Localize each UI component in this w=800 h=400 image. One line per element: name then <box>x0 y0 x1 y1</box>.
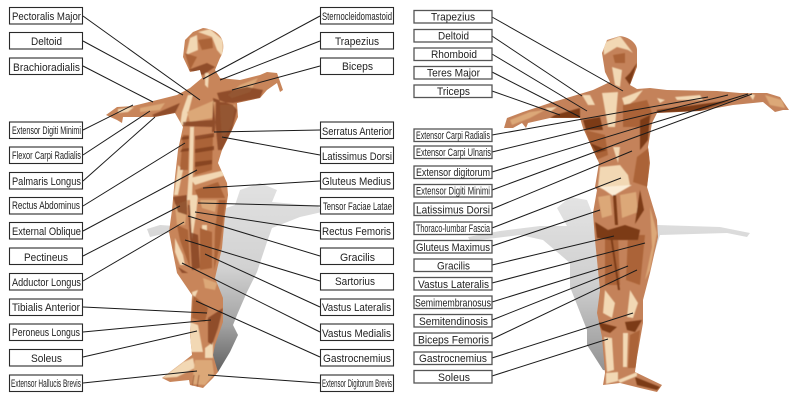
label column: back figure <box>414 10 492 384</box>
label: Teres Major <box>414 66 492 80</box>
label: Thoraco-lumbar Fascia <box>414 222 492 235</box>
label: Gluteus Maximus: Gluteus Maximus <box>416 242 490 254</box>
label: Sternocleidomastoid <box>320 8 394 24</box>
label: Deltoid <box>10 32 82 49</box>
label: Biceps <box>320 58 394 74</box>
label: Extensor Digitorum Brevis <box>320 375 394 392</box>
label column: front figure left <box>10 8 82 392</box>
label: Extensor Digiti Minimi <box>414 184 492 198</box>
label: Extensor digitorum: Extensor digitorum <box>416 167 490 179</box>
label: Serratus Anterior <box>320 122 394 138</box>
label: Adductor Longus <box>10 274 82 290</box>
label: Vastus Medialis <box>320 324 394 340</box>
label: Semitendinosis: Semitendinosis <box>419 316 488 328</box>
label: Semimembranosus: Semimembranosus <box>415 298 491 310</box>
label: Gracilis: Gracilis <box>340 252 375 264</box>
label: Flexor Carpi Radialis: Flexor Carpi Radialis <box>12 150 81 162</box>
leader lines: back figure <box>492 17 752 376</box>
label: Gluteus Medius: Gluteus Medius <box>322 176 391 188</box>
label: Serratus Anterior: Serratus Anterior <box>322 126 392 138</box>
label: Triceps: Triceps <box>437 86 470 98</box>
label: Gastrocnemius: Gastrocnemius <box>419 353 487 365</box>
label: Trapezius: Trapezius <box>335 36 379 48</box>
label: Extensor Carpi Radialis <box>414 129 492 142</box>
label: Tibialis Anterior: Tibialis Anterior <box>12 302 80 314</box>
label: Soleus <box>10 350 82 366</box>
label: Brachioradialis <box>10 58 82 74</box>
label: Vastus Lateralis: Vastus Lateralis <box>322 302 391 314</box>
label: Rhomboid <box>414 48 492 61</box>
label: Gastrocnemius: Gastrocnemius <box>323 353 391 365</box>
label: Pectineus <box>10 248 82 264</box>
label: Rectus Abdominus <box>10 198 82 214</box>
front muscle detail <box>118 29 263 388</box>
back muscle detail <box>510 36 785 390</box>
label: Rhomboid: Rhomboid <box>431 49 477 61</box>
label: Pectoralis Major <box>10 8 82 24</box>
label: Pectoralis Major: Pectoralis Major <box>12 11 81 23</box>
label: Rectus Femoris <box>320 222 394 239</box>
label: Soleus: Soleus <box>31 353 62 365</box>
label: Triceps <box>414 85 492 98</box>
label: Extensor Carpi Ulnaris <box>414 146 492 159</box>
label: Teres Major: Teres Major <box>427 68 480 80</box>
label: Extensor Hallucis Brevis <box>10 375 82 392</box>
label: Vastus Lateralis <box>320 299 394 316</box>
label: Latissimus Dorsi: Latissimus Dorsi <box>322 151 392 163</box>
label: Extensor Hallucis Brevis: Extensor Hallucis Brevis <box>11 378 81 390</box>
label: Latissimus Dorsi <box>320 147 394 164</box>
label: Gracilis: Gracilis <box>437 260 470 272</box>
label: Extensor Digiti Minimi: Extensor Digiti Minimi <box>416 186 490 198</box>
label: Peroneus Longus: Peroneus Longus <box>12 327 80 339</box>
leader lines: front figure <box>83 16 320 383</box>
label: External Oblique: External Oblique <box>12 226 81 238</box>
back body silhouette <box>504 36 789 392</box>
label: Vastus Medialis: Vastus Medialis <box>322 328 391 340</box>
label: Extensor Digitorum Brevis: Extensor Digitorum Brevis <box>322 378 392 390</box>
label: Gastrocnemius <box>320 350 394 366</box>
label: Sartorius: Sartorius <box>335 276 375 288</box>
label: Biceps: Biceps <box>342 61 373 73</box>
label: Gracilis <box>320 248 394 264</box>
label: Deltoid <box>414 30 492 42</box>
front body silhouette <box>106 28 283 388</box>
label: Vastus Lateralis: Vastus Lateralis <box>418 279 489 291</box>
label: Gluteus Medius <box>320 172 394 189</box>
label: Extensor Carpi Radialis: Extensor Carpi Radialis <box>416 130 490 142</box>
label: Rectus Femoris: Rectus Femoris <box>322 226 391 238</box>
shadow: back figure <box>468 197 750 372</box>
label: Peroneus Longus <box>10 324 82 340</box>
label: Trapezius: Trapezius <box>431 12 475 24</box>
leg gap showing shadow <box>616 295 624 370</box>
figure: back muscular man <box>504 36 789 392</box>
label: Extensor Digiti Minimi <box>10 122 82 138</box>
label: Tensor Faciae Latae: Tensor Faciae Latae <box>323 201 392 213</box>
label: Sartorius <box>320 274 394 290</box>
label: Soleus: Soleus <box>438 372 470 384</box>
label: External Oblique <box>10 222 82 239</box>
label: Adductor Longus: Adductor Longus <box>12 277 81 289</box>
label: Extensor Carpi Ulnaris: Extensor Carpi Ulnaris <box>416 147 491 159</box>
label: Gracilis <box>414 259 492 272</box>
label: Palmaris Longus: Palmaris Longus <box>12 176 81 188</box>
label: Pectineus: Pectineus <box>24 252 68 264</box>
label: Latissimus Dorsi: Latissimus Dorsi <box>416 204 490 216</box>
label: Soleus <box>414 370 492 384</box>
shadow: front figure <box>147 183 322 372</box>
label: Tensor Faciae Latae <box>320 198 394 214</box>
label: Trapezius <box>320 32 394 49</box>
label: Tibialis Anterior <box>10 299 82 316</box>
label: Palmaris Longus <box>10 172 82 189</box>
label: Trapezius <box>414 10 492 24</box>
label: Biceps Femoris: Biceps Femoris <box>418 334 489 346</box>
label: Rectus Abdominus: Rectus Abdominus <box>12 200 80 212</box>
label: Brachioradialis: Brachioradialis <box>13 62 80 74</box>
label: Extensor Digiti Minimi: Extensor Digiti Minimi <box>12 125 81 137</box>
label: Deltoid: Deltoid <box>438 30 469 42</box>
label: Sternocleidomastoid: Sternocleidomastoid <box>322 11 392 23</box>
label: Flexor Carpi Radialis <box>10 147 82 164</box>
label: Deltoid: Deltoid <box>31 36 62 48</box>
label: Thoraco-lumbar Fascia: Thoraco-lumbar Fascia <box>416 223 491 235</box>
label column: front figure right <box>320 8 394 392</box>
figure: front muscular man <box>106 28 283 388</box>
